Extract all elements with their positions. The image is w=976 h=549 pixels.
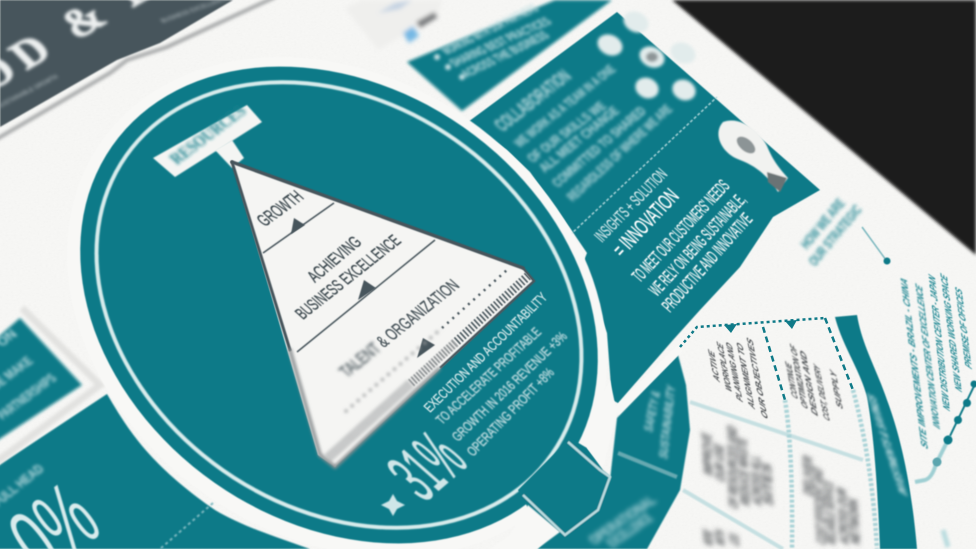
grid table: LESS: [728, 531, 743, 549]
collaboration text: ALL MEET CHANGE: [535, 103, 623, 175]
sector top label: [641, 382, 678, 461]
icon: light bulb: [718, 120, 788, 192]
grid text: blurred block one: REDUCE WASTE: [736, 435, 754, 509]
note connector with dot: [862, 227, 890, 264]
divider: [570, 97, 717, 235]
grid table: MORE: [701, 527, 717, 549]
innovation text: [628, 176, 756, 316]
innovation text: WE RELY ON BEING SUSTAINABLE,: [645, 190, 750, 300]
insights heading: INSIGHTS + SOLUTION: [591, 165, 671, 246]
grid text: active workplace: [707, 335, 770, 422]
light grid lines: [618, 402, 863, 549]
dark table corner: [672, 0, 976, 255]
white notch lower: [490, 505, 560, 549]
results label: [153, 102, 262, 177]
collaboration text: WE WORK AS A TEAM IN A ONE: [510, 62, 619, 150]
small lower right line: [943, 530, 948, 547]
grid text: blurred block three: [701, 527, 743, 549]
grid text: active workplace: WORKPLACE: [715, 340, 734, 395]
header banner: [0, 0, 275, 140]
pyramid tier markers: [291, 218, 435, 358]
timeline text: NEW DISTRIBUTION CENTER - JAPAN: [926, 272, 952, 414]
dashed connector: [160, 503, 213, 549]
innovation heading: = INNOVATION: [607, 184, 684, 261]
collaboration text: [510, 62, 675, 204]
big number 31%: [371, 417, 482, 516]
execution text: GROWTH IN 2016 REVENUE +3%: [448, 329, 570, 444]
pyramid tier dividers: [263, 203, 435, 352]
circle tab: [518, 438, 612, 538]
dotted grid outline: [680, 318, 877, 549]
grid text: blurred block one: ACROSS ALL: [749, 452, 766, 509]
tier label: talent and organization: TALENT: [335, 339, 385, 381]
grid text: continue optimization: OPTIMIZATION OF: [788, 342, 810, 412]
sector top label: SAFETY &: [641, 388, 663, 434]
grid text: continue optimization: SUPPLY: [828, 367, 845, 412]
pyramid dotted line: [442, 270, 507, 328]
tier label: talent and organization: & ORGANIZATION: [372, 276, 463, 351]
execution text: EXECUTION AND ACCOUNTABILITY: [420, 289, 551, 415]
header captions: [0, 0, 230, 109]
grid text: active workplace: OUR OBJECTIVES: [745, 335, 770, 422]
social links box at top: [345, 0, 442, 50]
panel: main circle: [0, 0, 704, 549]
grid table: WITH: [713, 527, 729, 549]
panel: lower left teal block: [0, 394, 310, 549]
execution text: OPERATING PROFIT +8%: [463, 365, 557, 459]
grid text: blurred block one: SITES: [760, 460, 777, 509]
pyramid chart: [232, 162, 534, 467]
pyramid hatched base: [320, 268, 534, 467]
grid text: blurred block two: DELIVER: [801, 453, 817, 499]
collaboration text: COMMITTED TO SHARED: [548, 103, 649, 190]
panel: collaboration and innovation: TO MEET OUR CUSTOMERS' NEEDS: [628, 176, 733, 286]
panel: left teal diamond: [0, 308, 100, 463]
top right note: HOW WE ARE: [797, 195, 848, 252]
collaboration heading: COLLABORATION: [490, 67, 576, 135]
collaboration text: OF OUR SKILLS WE: [523, 98, 609, 165]
timeline text: SITE IMPROVEMENTS - BRAZIL - CHINA: [898, 274, 930, 452]
collaboration text: REGARDLESS OF WHERE WE ARE: [563, 101, 675, 204]
big number 31%: 31%: [371, 417, 482, 514]
band label: INVESTMENTS & SAVINGS: [865, 391, 911, 499]
grid text: blurred block two: RELIABLE SERVICE: [822, 478, 840, 548]
tier label: talent and organization: [335, 276, 463, 381]
tier label: achieving business excellence: ACHIEVING: [303, 233, 366, 286]
grid text: continue optimization: [784, 342, 845, 424]
icons: people circles: [594, 7, 699, 104]
diamond text: [0, 326, 60, 422]
curved teal band: [835, 315, 917, 549]
white band inside gap: [587, 380, 617, 468]
grid text: blurred block two: NETWORK: [847, 495, 864, 548]
route timeline: [898, 271, 976, 547]
timeline text: NEW SHARED WORKING SPACE: [938, 271, 964, 395]
sector bottom label: OPERATIONAL: [585, 493, 660, 548]
panel: grid sector teal: [537, 355, 690, 549]
timeline stops: [932, 380, 976, 466]
grid text: blurred block two: [801, 453, 864, 548]
grid tab markers: [724, 320, 797, 333]
grid text: continue optimization: DESIGN AND: [798, 348, 820, 419]
timeline text: [898, 271, 974, 452]
timeline text: INNOVATION CENTER OF EXCELLENCE: [913, 281, 942, 432]
grid text: blurred block two: ACROSS OUR: [835, 485, 853, 548]
grid text: blurred block one: OUR USE: [712, 441, 729, 485]
top right note: OUR STRATEGIC: [805, 201, 865, 269]
execution text: TO ACCELERATE PROFITABLE: [432, 324, 544, 427]
grid text: continue optimization: CONTINUE: [784, 360, 800, 402]
grid text: active workplace: ALIGNMENT TO: [735, 340, 757, 412]
grid text: blurred block one: OF RESOURCES AND: [725, 423, 742, 512]
grid text: blurred block one: [700, 423, 777, 512]
diagonal white gutter: [616, 348, 680, 412]
results label: RESOURCES: [165, 102, 250, 168]
grid text: active workplace: PLANNING AND: [724, 340, 745, 405]
grid text: continue optimization: COST, DELIVERY: [812, 362, 832, 424]
sector bottom label: EXCELLENCE: [603, 511, 657, 549]
grid table: [618, 318, 877, 549]
grid text: blurred block two: COST EFFICIENT AND: [811, 465, 830, 548]
timeline text: PREMISE OF OFFICES: [953, 284, 974, 372]
grid text: active workplace: ACTIVE: [707, 347, 722, 385]
panel: collaboration and innovation: [468, 7, 820, 403]
pyramid outer edges: [232, 162, 523, 455]
sector top label: SUSTAINABILITY: [656, 382, 678, 461]
bullet points text: [434, 1, 555, 80]
panel: top teal block: [407, 0, 612, 111]
top right note: [797, 195, 890, 269]
tier label: growth: GROWTH: [253, 188, 308, 230]
sector bottom label: [585, 493, 660, 549]
grid text: blurred block one: IMPROVE: [700, 430, 717, 479]
innovation text: PRODUCTIVE AND INNOVATIVE: [658, 209, 756, 316]
execution text: [420, 289, 570, 459]
tier label: achieving business excellence: BUSINESS EXCELLENCE: [291, 231, 405, 323]
tier label: achieving business excellence: [291, 231, 405, 323]
